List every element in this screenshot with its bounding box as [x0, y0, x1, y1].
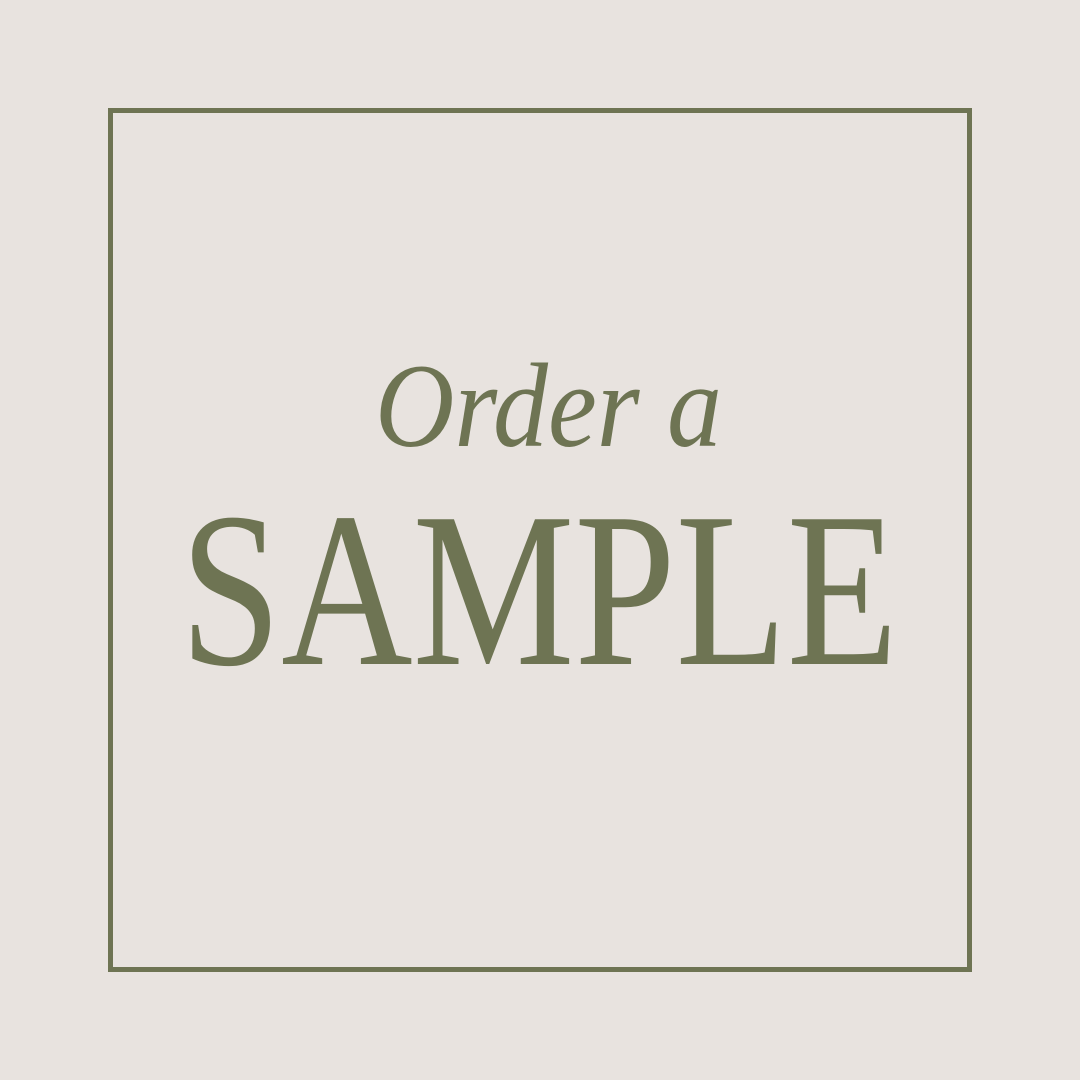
frame border: [110, 110, 970, 970]
heading: SAMPLE: SAMPLE: [180, 467, 898, 712]
heading: Order a: Order a: [375, 339, 722, 472]
